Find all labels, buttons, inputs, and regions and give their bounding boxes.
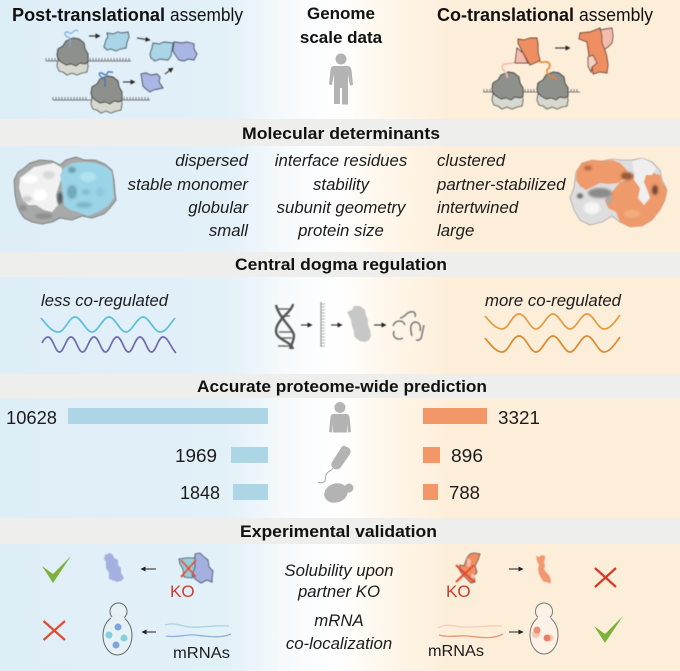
icon: red cross [595, 568, 616, 587]
section band: central dogma [0, 252, 680, 277]
title: genome scale data: Genome [307, 4, 375, 23]
left determinants list [128, 151, 249, 240]
title: post-translational assembly: assembly [170, 4, 244, 25]
icon: red cross [44, 621, 65, 640]
icon: bacterium [318, 446, 351, 483]
knocked-out orange complex [456, 553, 480, 583]
right protein structure [570, 158, 667, 227]
ribosome left [492, 72, 523, 109]
icon: yeast with blue granules [103, 603, 132, 655]
title: genome scale data: scale data [300, 28, 383, 47]
centre label: mRNA co-localization: co-localization [286, 634, 392, 653]
mRNA strand [483, 89, 580, 92]
centre label: solubility: Solubility upon [284, 561, 394, 580]
ribosome two [91, 76, 122, 113]
centre label: mRNA co-localization: mRNA [314, 611, 364, 630]
heading: accurate proteome-wide prediction: Accurate proteome-wide prediction [197, 377, 487, 396]
icon: yeast with orange granules [530, 603, 558, 654]
left determinants list: stable monomer [128, 175, 249, 194]
knocked-out complex [179, 553, 213, 583]
arrow [165, 68, 173, 74]
mRNA strand two [53, 97, 150, 100]
central dogma icons [276, 302, 424, 349]
icon: mRNA comb [321, 302, 325, 347]
title: co-translational assembly: Co-translational [437, 4, 574, 25]
folded complex [579, 28, 613, 74]
panel: post-translational diagram [46, 30, 197, 113]
mRNA strands left [165, 624, 231, 637]
arrow [509, 568, 523, 570]
centre determinants list [275, 151, 408, 240]
wave: light blue mRNA [41, 317, 175, 332]
icon: green check [594, 616, 623, 643]
nascent chain one [65, 30, 78, 47]
arrow [509, 631, 523, 633]
right determinants list: clustered [437, 151, 506, 170]
bar chart: post-translational counts: 1969 [175, 446, 217, 466]
arrow [123, 81, 135, 83]
centre label: solubility: partner KO [297, 582, 380, 601]
periwinkle monomer [104, 553, 124, 582]
section band: molecular determinants [0, 119, 680, 146]
right determinants list: intertwined [437, 198, 519, 217]
icon: yeast [322, 480, 354, 506]
arrow [555, 47, 570, 49]
mRNA strand one [46, 58, 131, 61]
label: mRNAs right: mRNAs [428, 643, 484, 660]
heading: central dogma regulation: Central dogma regulation [235, 255, 447, 274]
centre determinants list: subunit geometry [277, 198, 407, 217]
label: KO right: KO [446, 582, 471, 601]
right determinants list: partner-stabilized [436, 175, 566, 194]
label: more co-regulated: more co-regulated [485, 291, 622, 310]
nascent chain two [99, 72, 113, 87]
orange fragment [536, 555, 551, 584]
bar chart: post-translational counts: 10628 [6, 408, 57, 428]
ribosome right [537, 72, 568, 109]
wave: orange mRNA two [485, 336, 620, 352]
icon: degraded fragments [393, 312, 424, 340]
title: post-translational assembly: Post-translational [12, 4, 165, 25]
title: co-translational assembly: assembly [579, 4, 654, 25]
section band: validation [0, 518, 680, 544]
arrow [141, 568, 156, 570]
light pink chain [502, 59, 519, 78]
icon: human [329, 402, 351, 432]
centre label: mRNA co-localization [286, 611, 392, 653]
right determinants list [436, 151, 566, 240]
nascent dimer [515, 38, 540, 65]
panel: co-translational diagram [483, 28, 613, 109]
mRNA strands right [438, 625, 503, 638]
label: mRNAs left: mRNAs [173, 645, 230, 662]
centre determinants list: protein size [297, 221, 384, 240]
label: less co-regulated: less co-regulated [41, 291, 169, 310]
right determinants list: large [437, 221, 474, 240]
arrow [89, 35, 100, 37]
bar chart: co-translational counts: 3321 [498, 408, 540, 428]
left determinants list: dispersed [175, 151, 249, 170]
centre determinants list: stability [313, 175, 371, 194]
assembled dimer [150, 42, 197, 61]
bar chart: co-translational counts: 788 [449, 483, 480, 503]
centre determinants list: interface residues [275, 151, 408, 170]
section band: prediction [0, 374, 680, 398]
heading: experimental validation: Experimental validation [240, 522, 437, 541]
arrow [374, 324, 386, 326]
wave: purple mRNA [42, 337, 176, 353]
icon: person [329, 54, 353, 104]
bar chart: co-translational counts: 896 [451, 446, 483, 466]
orange chain [537, 59, 557, 79]
blue monomer [104, 32, 129, 51]
left protein structure [14, 157, 116, 224]
centre label: solubility [284, 561, 394, 601]
arrow [301, 324, 312, 326]
arrow [137, 38, 150, 40]
arrow [142, 631, 156, 633]
icon: green check [42, 556, 71, 583]
arrow [331, 324, 342, 326]
ribosome one [57, 38, 88, 75]
icon: DNA helix [276, 304, 294, 349]
icon: protein silhouette [347, 306, 371, 342]
left determinants list: small [209, 221, 249, 240]
wave: orange mRNA one [485, 314, 620, 329]
bar chart: post-translational counts: 1848 [180, 483, 220, 503]
left determinants list: globular [188, 198, 249, 217]
label: KO left: KO [170, 582, 195, 601]
periwinkle monomer [141, 73, 163, 92]
title: genome scale data [300, 4, 383, 47]
heading: molecular determinants: Molecular determinants [242, 124, 440, 143]
bar chart: post-translational counts [6, 408, 268, 503]
bar chart: co-translational counts [423, 408, 540, 503]
